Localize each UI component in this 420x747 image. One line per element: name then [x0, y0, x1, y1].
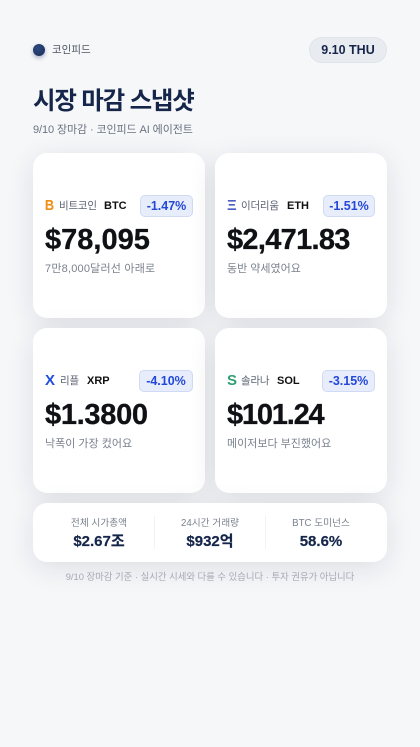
SOL note: 메이저보다 부진했어요 — [227, 438, 331, 450]
stat: BTC dominance — [292, 518, 350, 550]
stat: BTC dominance: BTC 도미넌스 — [292, 518, 350, 529]
icon: solana: S — [227, 372, 237, 389]
XRP symbol: XRP — [87, 375, 110, 387]
XRP change badge — [139, 370, 193, 392]
BTC name: 비트코인 — [59, 200, 97, 212]
SOL symbol: SOL — [277, 375, 300, 387]
XRP change badge: -4.10% — [146, 374, 186, 388]
icon: bitcoin: B — [45, 197, 54, 214]
BTC change badge: -1.47% — [147, 199, 186, 213]
stat: 24h volume: $932억 — [186, 533, 234, 550]
footer disclaimer: 9/10 장마감 기준 · 실시간 시세와 다를 수 있습니다 · 투자 권유가 아닙니다 — [66, 571, 354, 582]
title: 시장 마감 스냅샷 — [33, 88, 194, 115]
XRP price: $1.3800 — [45, 399, 148, 431]
brand logo dot — [33, 44, 45, 56]
XRP note: 낙폭이 가장 컸어요 — [45, 438, 132, 450]
subtitle: 9/10 장마감 · 코인피드 AI 에이전트 — [33, 124, 193, 136]
ETH change badge — [323, 195, 375, 217]
panel: BTC — [33, 153, 205, 318]
ETH name: 이더리움 — [241, 200, 279, 212]
BTC symbol: BTC — [104, 200, 127, 212]
panel: market stats — [33, 503, 387, 562]
icon: ripple: X — [45, 372, 55, 389]
panel: ETH — [215, 153, 387, 318]
ETH price: $2,471.83 — [227, 224, 350, 256]
stat: 24h volume — [181, 518, 239, 550]
ETH change badge: -1.51% — [329, 199, 369, 213]
brand name: 코인피드 — [52, 44, 91, 56]
SOL change badge: -3.15% — [329, 374, 368, 388]
ETH symbol: ETH — [287, 200, 309, 212]
date pill: 9.10 THU — [321, 43, 375, 57]
XRP name: 리플 — [60, 375, 79, 387]
icon: ethereum: Ξ — [227, 197, 237, 214]
SOL name: 솔라나 — [241, 375, 269, 387]
SOL price: $101.24 — [227, 399, 323, 431]
stat: total market cap: 전체 시가총액 — [71, 518, 127, 529]
stat: total market cap: $2.67조 — [73, 533, 125, 550]
panel: XRP — [33, 328, 205, 493]
SOL change badge — [322, 370, 375, 392]
stat: 24h volume: 24시간 거래량 — [181, 518, 239, 529]
date pill — [309, 37, 387, 63]
BTC change badge — [140, 195, 193, 217]
BTC price: $78,095 — [45, 224, 150, 256]
stat: total market cap — [71, 518, 127, 550]
ETH note: 동반 약세였어요 — [227, 263, 301, 275]
panel: SOL — [215, 328, 387, 493]
stat: BTC dominance: 58.6% — [300, 533, 342, 550]
BTC note: 7만8,000달러선 아래로 — [45, 263, 155, 275]
